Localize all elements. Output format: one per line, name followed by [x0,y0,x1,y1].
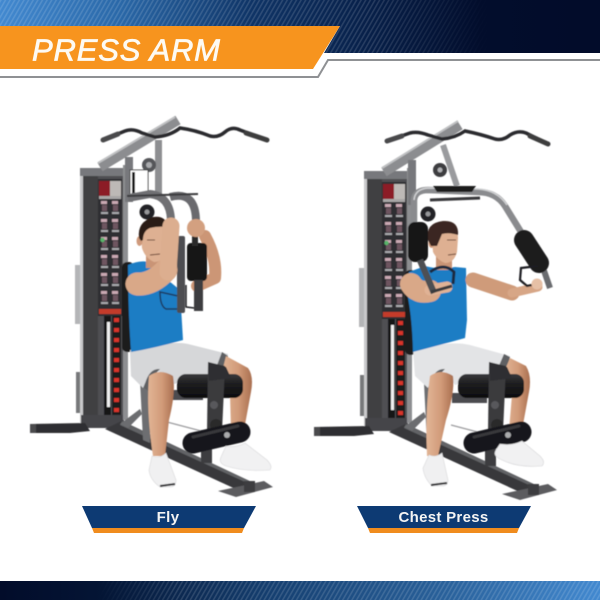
tank neckline [430,267,454,284]
label: Fly: Fly [157,509,180,526]
back pad [405,270,416,355]
leg lever and rollers [177,362,243,443]
bottom footer band [0,581,600,600]
tank top [128,261,183,352]
top arm and lat bar [98,117,267,202]
panel: Fly exercise photo [30,117,273,497]
orange title tab [0,26,340,69]
far leg [504,358,530,430]
label: Chest Press [357,506,531,533]
far arm [197,236,215,286]
leg lever and rollers [458,362,524,443]
top arm and lat bar [382,121,548,222]
shorts [413,343,510,388]
press arm tubes [127,194,198,222]
tank top [405,266,467,352]
label: Chest Press: Chest Press [398,509,489,526]
pad and handles [177,219,207,313]
near leg [426,372,453,456]
label: Fly [82,506,256,533]
press pads and handles [408,222,542,293]
gym machine frame [30,165,273,497]
press arm tubes [414,186,550,288]
shoes [149,443,271,487]
arms [411,280,538,293]
man's head [136,217,168,268]
far leg [222,356,252,430]
near arm [137,226,171,284]
man's head [428,221,458,270]
near leg [148,372,174,456]
shoes [423,441,544,486]
top header band [0,0,600,77]
title: PRESS ARM [32,32,220,68]
shorts [130,343,228,388]
back pad [122,262,134,352]
panel: Chest Press exercise photo [314,121,557,500]
gym machine frame [314,168,557,500]
